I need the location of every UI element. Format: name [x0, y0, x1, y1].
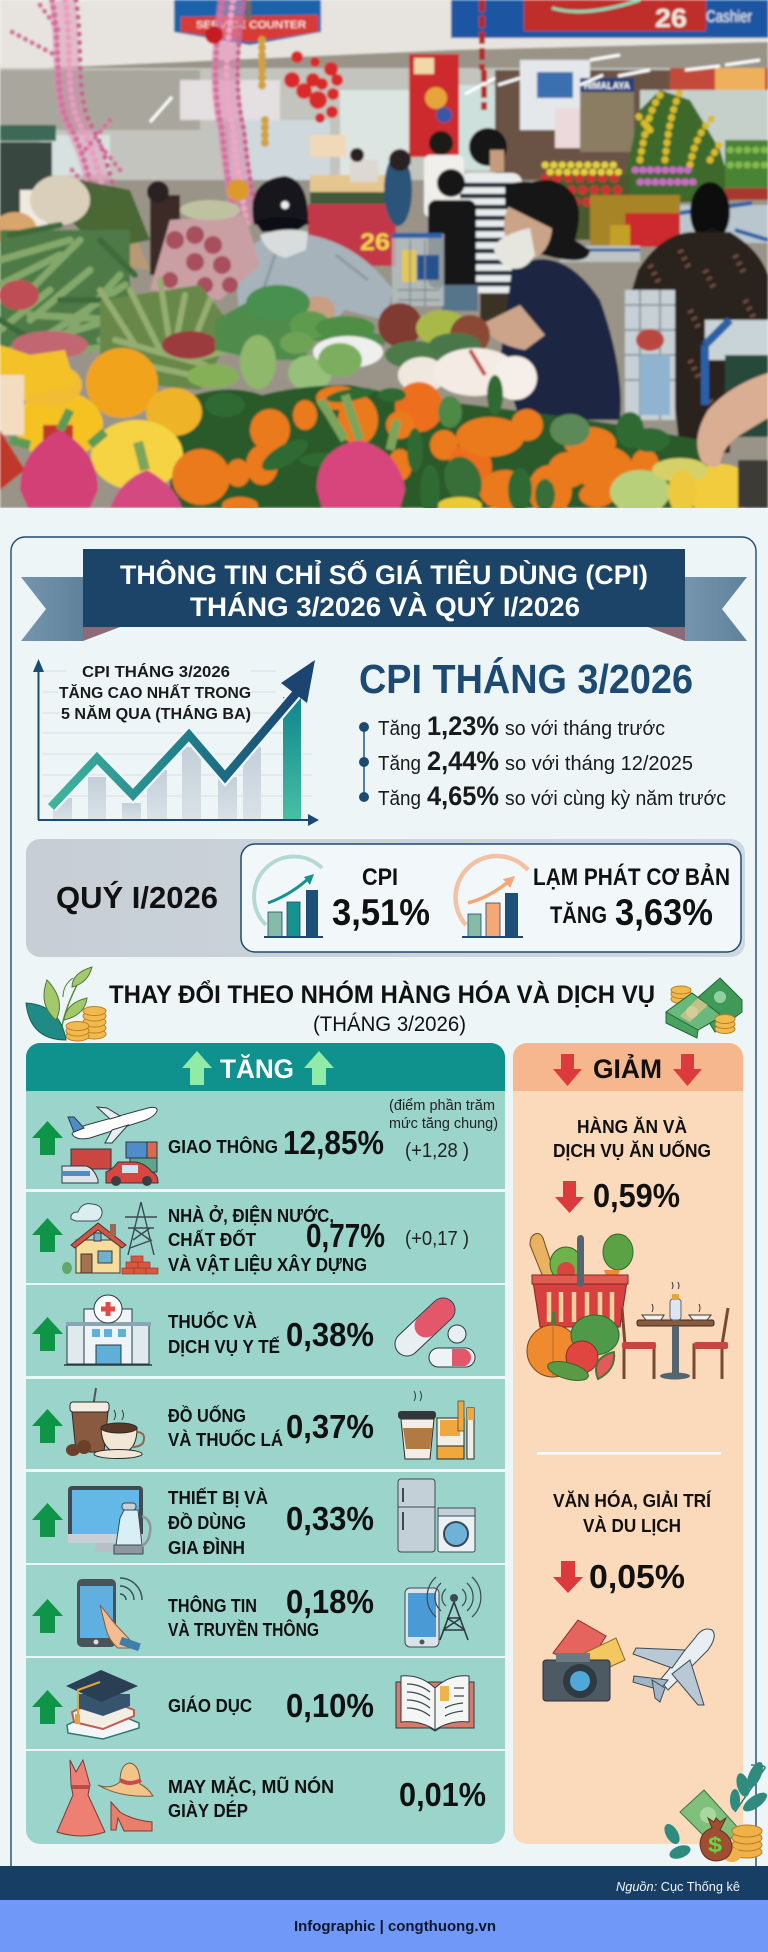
culture and tourism: VÀ DU LỊCH: [583, 1515, 681, 1536]
cart right: [625, 290, 675, 420]
photo: shoppers at supermarket fruit stall: Cashier: [706, 7, 752, 26]
row: information and communication: [26, 1565, 505, 1656]
photo: shoppers at supermarket fruit stall: [0, 0, 768, 516]
quarter label: QUÝ I/2026: [56, 880, 218, 915]
icon: fridge and washer: [398, 1479, 475, 1552]
melons bottom right: [610, 470, 670, 514]
row: transport: GIAO THÔNG: [168, 1136, 278, 1157]
icon: CPI bars: [254, 857, 323, 937]
row: information and communication: 0,18%: [286, 1583, 374, 1620]
row: household appliances: [26, 1472, 505, 1563]
icon: airplane: [633, 1629, 714, 1705]
sign: blue left: [174, 0, 321, 45]
title ribbon banner: [21, 549, 747, 641]
row: drinks and tobacco: ĐỒ UỐNG: [168, 1405, 246, 1426]
row: medicine and health: DỊCH VỤ Y TẾ: [168, 1336, 280, 1357]
photo: shoppers at supermarket fruit stall: SERVICE COUNTER: [196, 20, 306, 31]
CPI March bullet list: [359, 711, 726, 811]
section heading: [109, 979, 655, 1036]
icon: dress, hat, shoe: [57, 1760, 153, 1836]
icon: plane, containers, car, train: [62, 1107, 158, 1186]
decorative money bag corner: $: [708, 1834, 722, 1857]
icon: open book: [396, 1676, 474, 1731]
note: percentage points: mức tăng chung): [389, 1115, 498, 1132]
decrease header: GIẢM: [593, 1052, 662, 1084]
panel: quarter I/2026: [26, 839, 745, 957]
row: household appliances: 0,33%: [286, 1500, 374, 1537]
chart caption: 5 NĂM QUA (THÁNG BA): [61, 704, 251, 723]
row: clothing, hats, footwear: MAY MẶC, MŨ NÓN: [168, 1776, 334, 1797]
decorative money bag corner: [661, 1760, 768, 1862]
title text: THÔNG TIN CHỈ SỐ GIÁ TIÊU DÙNG (CPI): [120, 558, 648, 590]
ceiling lights: [150, 55, 760, 122]
striped shirt shopper: [469, 128, 507, 166]
row: education: 0,10%: [286, 1687, 374, 1724]
title text: [120, 558, 648, 622]
icon: tickets and camera: [543, 1620, 625, 1701]
green foliage under fruit: [170, 385, 730, 508]
row: information and communication: THÔNG TIN: [168, 1595, 257, 1616]
row: transport: 12,85%: [283, 1124, 384, 1161]
black-shirt boy: [437, 169, 465, 197]
icon: graduation cap and books: [66, 1670, 139, 1739]
icon: hospital: [64, 1295, 152, 1365]
cart: [392, 234, 444, 306]
row: medicine and health: [26, 1285, 505, 1376]
row: clothing, hats, footwear: [26, 1751, 505, 1844]
row: housing, utilities: NHÀ Ở, ĐIỆN NƯỚC,: [168, 1205, 334, 1226]
culture and tourism: 0,05%: [589, 1558, 685, 1595]
flower display right: [625, 90, 735, 205]
panel: increase: [26, 1043, 505, 1844]
icon: cup and cigarettes: [398, 1391, 474, 1459]
footer source bar: [0, 1866, 768, 1900]
chart caption: CPI THÁNG 3/2026: [82, 662, 230, 681]
CPI value: CPI: [362, 864, 398, 891]
icon: plant and coins: [26, 967, 106, 1041]
food and dining: DỊCH VỤ ĂN UỐNG: [553, 1140, 711, 1161]
CPI March bullet list: Tăng: [378, 718, 421, 740]
row: housing, utilities: VÀ VẬT LIỆU XÂY DỰNG: [168, 1254, 367, 1275]
section heading: THAY ĐỔI THEO NHÓM HÀNG HÓA VÀ DỊCH VỤ: [109, 979, 655, 1009]
core inflation value: TĂNG: [550, 901, 607, 929]
icon: monitor and kettle: [68, 1486, 150, 1554]
CPI March bullet list: 1,23%: [427, 711, 499, 741]
core inflation value: 3,63%: [615, 892, 713, 933]
white pomelos: [398, 357, 446, 393]
CPI March heading: CPI THÁNG 3/2026: [359, 656, 693, 702]
row: education: [26, 1658, 505, 1749]
CPI value: 3,51%: [332, 892, 430, 933]
CPI March bullet list: Tăng: [378, 753, 421, 775]
shopper with black cap and hoodie: [237, 235, 393, 325]
shopper with mask and dark jacket: [500, 259, 621, 420]
leaves between fruit: [205, 343, 670, 515]
note: percentage points: (+1,28 ): [405, 1140, 469, 1162]
culture and tourism: VĂN HÓA, GIẢI TRÍ: [553, 1490, 712, 1511]
photo: shoppers at supermarket fruit stall: HIMALAYA: [584, 81, 630, 92]
divider: [537, 1452, 721, 1454]
dragon fruit: [20, 430, 98, 508]
credit bar: [0, 1900, 768, 1952]
red banner: [409, 54, 459, 157]
white-shirt shopper: [424, 155, 464, 217]
yellow pomelos: [86, 348, 158, 418]
row: medicine and health: THUỐC VÀ: [168, 1311, 257, 1332]
CPI March bullet list: Tăng: [378, 788, 421, 810]
hand and arm right: [697, 373, 768, 467]
food and dining: 0,59%: [593, 1177, 680, 1214]
row: housing, utilities: 0,77%: [306, 1217, 385, 1254]
row: medicine and health: 0,38%: [286, 1316, 374, 1353]
icon: phone and antenna: [405, 1577, 481, 1647]
CPI March bullet list: so với tháng trước: [505, 718, 665, 740]
row: household appliances: ĐỒ DÙNG: [168, 1512, 246, 1533]
icon: dining table: [622, 1282, 728, 1380]
icon: pills: [407, 1310, 475, 1367]
apples in nets: [150, 215, 260, 300]
line chart with rising arrow: [33, 659, 319, 826]
photo: shoppers at supermarket fruit stall: 26: [655, 3, 687, 33]
CPI March bullet list: 4,65%: [427, 781, 499, 811]
row: clothing, hats, footwear: 0,01%: [399, 1776, 486, 1813]
icon: house, pylon, bricks: [62, 1202, 158, 1274]
row: drinks and tobacco: VÀ THUỐC LÁ: [168, 1429, 283, 1450]
food and dining: HÀNG ĂN VÀ: [577, 1116, 687, 1137]
note: percentage points: (điểm phần trăm: [389, 1097, 495, 1114]
rambutan & melon: [378, 303, 422, 347]
increase header: [26, 1043, 505, 1091]
icon: coffee: [66, 1388, 144, 1458]
green custard apples and guavas: [215, 290, 385, 360]
shelves / people far: [310, 175, 395, 205]
icon: core inflation bars: [456, 856, 528, 937]
woman in dark dress, right: [690, 182, 730, 242]
chart caption: [59, 662, 251, 723]
icon: money stack: [666, 978, 742, 1038]
CPI March bullet list: so với cùng kỳ năm trước: [505, 788, 726, 810]
row: transport: [26, 1091, 505, 1189]
footer source bar: Nguồn: Cục Thống kê: [616, 1879, 740, 1894]
core inflation value: LẠM PHÁT CƠ BẢN: [533, 862, 730, 891]
food and dining: [553, 1116, 711, 1214]
oranges: [172, 382, 659, 515]
sign: blue right: [451, 0, 768, 38]
row: drinks and tobacco: [26, 1379, 505, 1469]
culture and tourism: [553, 1490, 712, 1595]
CPI March bullet list: so với tháng 12/2025: [505, 753, 693, 775]
credit bar: Infographic | congthuong.vn: [294, 1918, 496, 1935]
icon: shopping basket with vegetables: [527, 1234, 633, 1384]
core inflation value: [533, 862, 730, 933]
leafy pineapple tops: [0, 230, 130, 350]
section heading: (THÁNG 3/2026): [313, 1013, 466, 1036]
row: information and communication: VÀ TRUYỀN THÔNG: [168, 1619, 319, 1640]
chart caption: TĂNG CAO NHẤT TRONG: [59, 683, 251, 702]
row: housing, utilities: CHẤT ĐỐT: [168, 1229, 257, 1250]
photo: shoppers at supermarket fruit stall: 26: [360, 229, 390, 256]
row: housing, utilities: [26, 1192, 505, 1283]
decrease header: [553, 1052, 702, 1086]
CPI value: [332, 864, 430, 933]
row: housing, utilities: (+0,17 ): [405, 1228, 469, 1250]
pink blossoms columns: [62, 0, 100, 190]
increase header: TĂNG: [220, 1053, 294, 1084]
icon: phone with hand: [77, 1578, 142, 1651]
CPI March bullet list: 2,44%: [427, 746, 499, 776]
note: percentage points: [389, 1097, 498, 1162]
panel: decrease: [513, 1043, 743, 1844]
main panel frame: [11, 537, 756, 1866]
row: household appliances: THIẾT BỊ VÀ: [168, 1487, 268, 1508]
row: clothing, hats, footwear: GIÀY DÉP: [168, 1800, 248, 1821]
row: education: GIÁO DỤC: [168, 1695, 252, 1716]
title text: THÁNG 3/2026 VÀ QUÝ I/2026: [190, 591, 580, 622]
lanterns: [284, 51, 343, 123]
row: drinks and tobacco: 0,37%: [286, 1408, 374, 1445]
row: household appliances: GIA ĐÌNH: [168, 1537, 245, 1558]
